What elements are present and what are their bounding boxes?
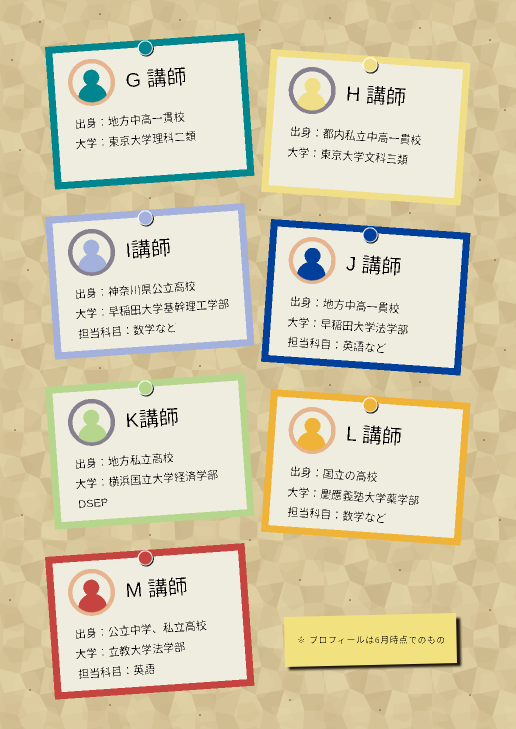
card: H講師	[265, 51, 467, 202]
note text: ※ プロフィールは6月時点でのもの	[297, 635, 445, 645]
pin	[137, 210, 154, 227]
pin	[137, 550, 154, 567]
card: J講師	[265, 221, 467, 372]
details	[287, 124, 422, 168]
pin	[362, 227, 379, 244]
details	[286, 294, 410, 357]
pin	[362, 57, 379, 74]
details: 出身：地方中高一貫校	[289, 294, 400, 316]
name: M 講師	[125, 575, 188, 602]
details	[73, 618, 210, 681]
details: 出身：地方私立高校	[74, 450, 174, 471]
card: G講師	[49, 34, 251, 186]
details	[286, 464, 421, 528]
details: 大学：東京大学理科二類	[75, 129, 197, 151]
card: M講師	[49, 544, 251, 696]
avatar icon	[69, 400, 114, 445]
details: 大学：立教大学法学部	[75, 639, 186, 661]
details: 担当科目：数学など	[287, 504, 387, 525]
details: 大学：横浜国立大学経済学部	[75, 467, 218, 491]
details: 大学：慶應義塾大学薬学部	[287, 484, 420, 508]
pin	[362, 397, 379, 414]
details	[73, 109, 197, 151]
details: 出身：地方中高一貫校	[74, 109, 185, 131]
details: DSEP	[78, 497, 109, 511]
avatar icon	[289, 68, 335, 113]
avatar icon	[289, 408, 335, 453]
avatar icon	[69, 60, 114, 105]
name: H 講師	[345, 82, 407, 110]
card: K講師	[49, 374, 251, 526]
card: L講師	[265, 391, 467, 542]
details: 出身：都内私立中高一貫校	[289, 124, 422, 147]
name: L 講師	[345, 422, 403, 449]
card: I講師	[49, 204, 251, 356]
details: 大学：早稲田大学基幹理工学部	[75, 296, 229, 321]
avatar icon	[69, 570, 114, 615]
details: 出身：国立の高校	[289, 464, 378, 484]
details	[73, 447, 220, 511]
sticky note	[284, 613, 461, 670]
details	[73, 276, 231, 341]
name: K講師	[125, 406, 180, 432]
avatar icon	[69, 230, 114, 275]
pin	[137, 380, 154, 397]
pin	[137, 40, 154, 57]
details: 担当科目：英語	[78, 662, 156, 681]
name: I講師	[125, 236, 172, 262]
name: J 講師	[345, 252, 402, 279]
name: G 講師	[125, 65, 187, 92]
details: 大学：東京大学文科三類	[287, 144, 409, 167]
details: 大学：早稲田大学法学部	[287, 314, 409, 337]
details: 担当科目：英語など	[287, 334, 387, 355]
avatar icon	[289, 238, 335, 283]
details: 出身：神奈川県公立高校	[74, 279, 196, 301]
details: 担当科目：数学など	[78, 320, 177, 341]
details: 出身：公立中学、私立高校	[74, 618, 207, 641]
